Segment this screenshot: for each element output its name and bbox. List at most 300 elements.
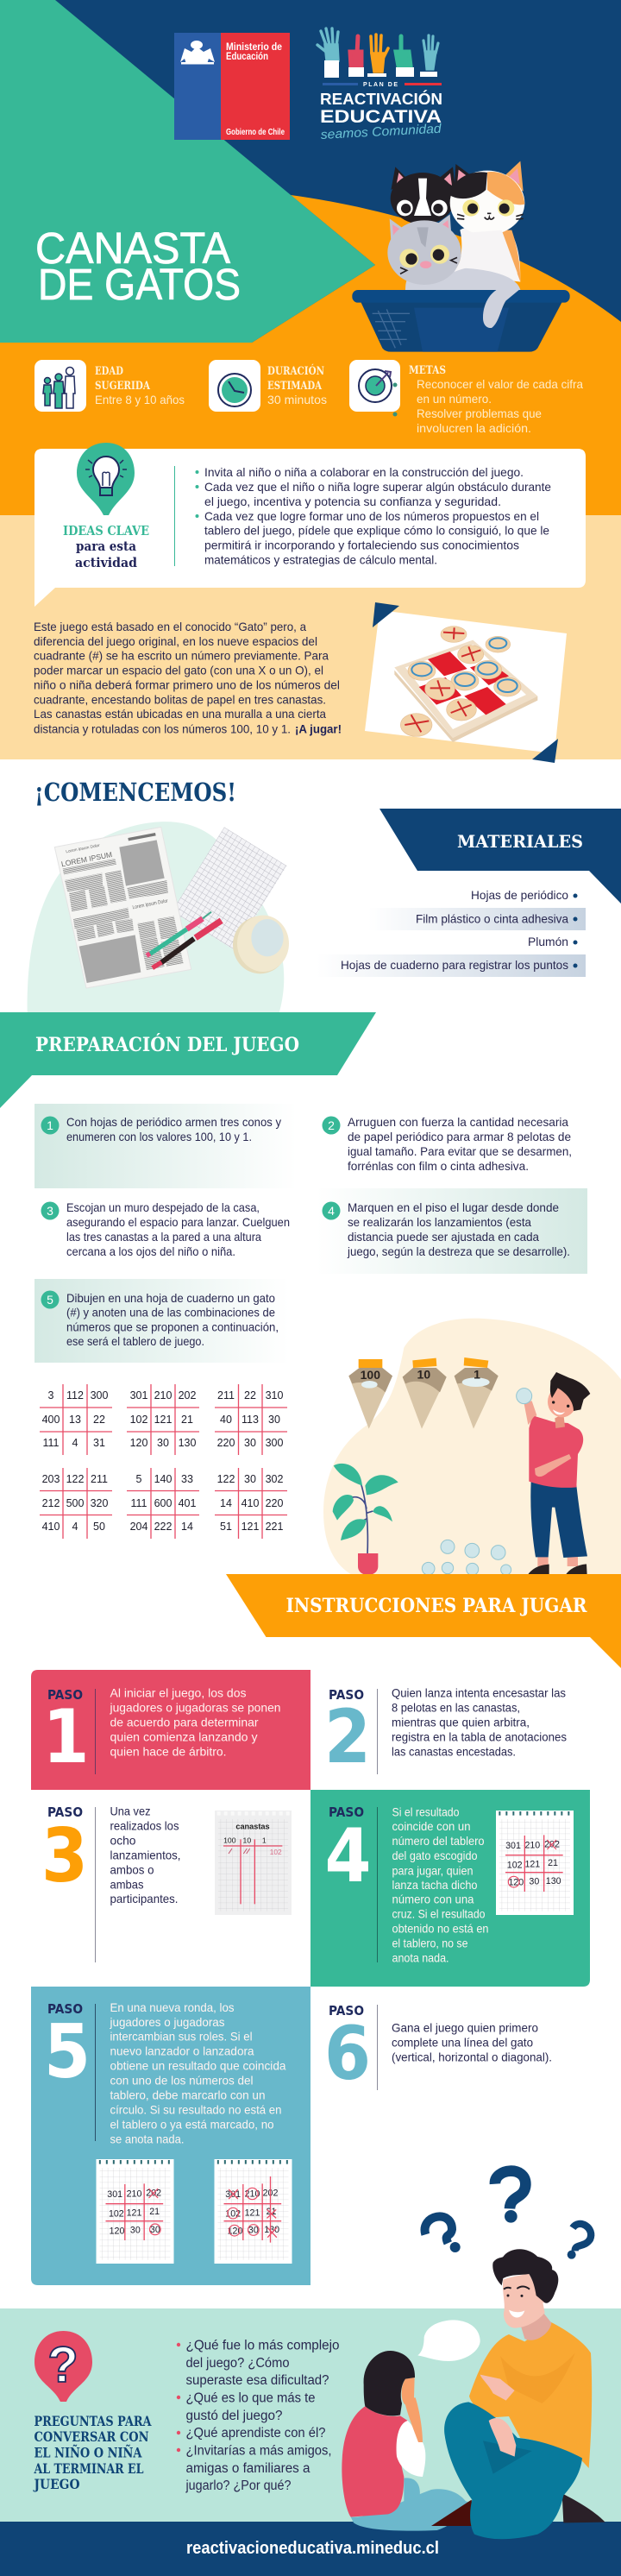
paso 1: jugadores o jugadoras se ponen: [110, 1700, 281, 1714]
text block: game description: distancia y rotuladas con los números 100, 10 y 1.: [34, 721, 291, 735]
paso 3: participantes.: [110, 1892, 178, 1905]
list: materials: [317, 888, 586, 977]
step card 2: forrénlas con film o cinta adhesiva.: [348, 1159, 529, 1173]
paso 3: ambos o: [110, 1862, 154, 1876]
logo: Ministerio de Educación: Ministerio de: [226, 42, 282, 53]
notepad: finished board: 121: [245, 2208, 260, 2219]
list: key ideas: Cada vez que logre formar uno de los números propuestos en el: [204, 509, 539, 523]
heading: questions: CONVERSAR CON: [34, 2428, 148, 2445]
board 4: 50: [93, 1521, 105, 1533]
paso 5: el tablero o ya está marcado, no: [110, 2118, 274, 2132]
paso 2: las canastas encestadas.: [392, 1745, 516, 1759]
notepad: canastas tally: 10: [243, 1836, 251, 1845]
list: questions: ¿Qué fue lo más complejo: [186, 2339, 340, 2352]
question marks: [425, 2171, 591, 2251]
card: age: EDAD: [95, 365, 123, 378]
logo: Ministerio de Educación: Gobierno de Chile: [226, 127, 285, 137]
heading: questions: PREGUNTAS PARA: [34, 2413, 152, 2429]
board 6: 221: [266, 1521, 283, 1533]
paso 6: 6: [324, 2011, 371, 2097]
step card 5: números que se proponen a continuación,: [66, 1320, 279, 1334]
panel: key ideas callout: para esta: [76, 539, 136, 554]
notepad: board with circle: 21: [149, 2207, 160, 2217]
paper balls: [422, 1540, 511, 1575]
newspaper: [54, 827, 191, 988]
heading: questions: EL NIÑO O NIÑA: [34, 2444, 142, 2461]
panel: key ideas callout: [34, 443, 586, 607]
list: questions: ¿Qué aprendiste con él?: [186, 2426, 326, 2441]
step card 1: Con hojas de periódico armen tres conos y: [66, 1115, 281, 1129]
paso 4: coincide con un: [392, 1819, 471, 1833]
step card 4: Marquen en el piso el lugar desde donde: [348, 1200, 559, 1214]
board 1: 22: [93, 1414, 105, 1426]
title: DE GATOS: [38, 260, 241, 309]
notepad: marked board: 30: [529, 1877, 539, 1887]
board 6: 121: [242, 1521, 259, 1533]
notepad: finished board: 120: [228, 2226, 242, 2236]
step card 2: de papel periódico para armar 8 pelotas de: [348, 1130, 571, 1143]
newspaper: LOREM IPSUM: [60, 850, 113, 868]
card: duration: [209, 360, 327, 412]
step card 4: distancia puede ser ajustada en cada: [348, 1230, 539, 1244]
card: goals: [349, 360, 583, 435]
board 1: 111: [42, 1437, 60, 1449]
card: age: SUGERIDA: [95, 380, 151, 393]
list: questions: ¿Invitarías a más amigos,: [186, 2444, 331, 2458]
list: questions: amigas o familiares a: [186, 2461, 310, 2476]
cone 10: [403, 1358, 447, 1429]
board 2: 210: [154, 1389, 172, 1401]
board 4: 320: [91, 1497, 108, 1509]
cone 100: 100: [361, 1368, 380, 1382]
notepad: canastas tally: 100: [223, 1836, 236, 1845]
paso 3: lanzamientos,: [110, 1849, 181, 1862]
notepad: canastas tally: [215, 1811, 292, 1915]
step card 5: 5: [47, 1293, 53, 1307]
paso 6: Gana el juego quien primero: [392, 2021, 538, 2035]
paso 3: realizados los: [110, 1819, 179, 1833]
notepad: board with circle: 30: [130, 2226, 141, 2236]
notepad: finished board: 130: [264, 2225, 279, 2235]
step card 5: (#) y anoten una de las combinaciones de: [66, 1305, 275, 1319]
board 5: 401: [179, 1497, 196, 1509]
paso 3: Una vez: [110, 1804, 150, 1817]
board 1: 13: [69, 1414, 81, 1426]
notepad: marked board: 202: [544, 1839, 560, 1849]
board 1: 400: [42, 1414, 60, 1426]
notepad: canastas tally: canastas: [235, 1822, 270, 1830]
list: questions: [177, 2339, 340, 2493]
icon: coat of arms: [180, 41, 215, 64]
calico cat: [450, 161, 524, 282]
board 3: 22: [244, 1389, 256, 1401]
notepad: board with circle: 120: [110, 2226, 124, 2236]
notepad: board with circle: 210: [127, 2189, 141, 2199]
board 2: 121: [154, 1414, 172, 1426]
notepad: canastas tally: 102: [270, 1848, 282, 1856]
step card 4: [317, 1188, 587, 1274]
pens: [147, 912, 222, 968]
paso 5: se anota nada.: [110, 2132, 185, 2145]
icon: light bulb pin: [77, 443, 135, 515]
card: goals: involucren la adición.: [417, 421, 531, 435]
paso 4: del gato escogido: [392, 1849, 478, 1862]
list: questions: ¿Qué es lo que más te: [186, 2390, 316, 2406]
banner: Preparación del juego: PREPARACIÓN DEL JUEGO: [35, 1033, 299, 1056]
board 4: 203: [42, 1473, 60, 1485]
paso 3: 3: [41, 1813, 88, 1899]
step card 3: asegurando el espacio para lanzar. Cuelguen: [66, 1215, 290, 1229]
paso 5: 5: [44, 2009, 91, 2095]
graph paper: [172, 827, 287, 950]
board 5: 111: [130, 1497, 147, 1509]
panel: key ideas callout: IDEAS CLAVE: [63, 523, 149, 539]
notepad: finished board: 202: [263, 2188, 278, 2198]
board 4: 500: [66, 1497, 84, 1509]
banner: Materiales: [380, 809, 621, 904]
icon: target: [359, 369, 392, 402]
paso 6: PASO: [329, 2003, 364, 2019]
board 4: 122: [66, 1473, 84, 1485]
title: CANASTA: [35, 224, 230, 273]
photo: tic-tac-toe board: [365, 602, 567, 763]
notepad: marked board: 130: [546, 1876, 561, 1886]
paso 1: quien comienza lanzando y: [110, 1729, 257, 1743]
list: key ideas: permitirá ir incorporando y fortaleciendo sus conocimientos: [204, 539, 519, 552]
notepad: finished board: [214, 2159, 292, 2264]
text block: game description: poder marcar un espacio del gato (con una X o un O), el: [34, 663, 323, 677]
board 2: 202: [179, 1389, 196, 1401]
step card 3: las tres canastas a la pared a una altura: [66, 1230, 261, 1244]
black cat: [391, 167, 455, 224]
card: goals: en un número.: [417, 392, 492, 406]
notepad: finished board: 301: [225, 2189, 241, 2200]
text block: game description: niño o niña deberá formar primero uno de los números del: [34, 678, 340, 692]
board 5: 5: [136, 1473, 142, 1485]
board 1: 3: [48, 1389, 54, 1401]
board 5: 600: [154, 1497, 172, 1509]
board 5: 33: [181, 1473, 193, 1485]
step card 2: [323, 1115, 572, 1173]
list: key ideas: matemáticos y estrategias de cálculo mental.: [204, 552, 437, 566]
board 2: 130: [179, 1437, 196, 1449]
list: materials: Hojas de periódico: [471, 888, 568, 902]
step card 4: se realizarán los lanzamientos (esta: [348, 1215, 531, 1229]
notepad: marked board: 21: [548, 1858, 558, 1868]
step card 1: enumeren con los valores 100, 10 y 1.: [66, 1130, 252, 1143]
list: key ideas: el juego, incentiva y potencia su confianza y seguridad.: [204, 494, 501, 508]
board 6: 220: [266, 1497, 283, 1509]
paso 1: de acuerdo para determinar: [110, 1716, 259, 1729]
banner: Instrucciones para jugar: INSTRUCCIONES PARA JUGAR: [286, 1595, 587, 1617]
paso 3: PASO: [47, 1804, 83, 1820]
notepad: marked board: 102: [507, 1860, 523, 1870]
heading: questions: AL TERMINAR EL: [34, 2460, 144, 2477]
notepad: finished board: 30: [248, 2226, 259, 2236]
text block: game description: Este juego está basado en el conocido “Gato” pero, a: [34, 620, 306, 633]
speech bubble: [417, 2320, 480, 2361]
board 5: 222: [154, 1521, 172, 1533]
basket: [352, 290, 570, 352]
board 4: 4: [72, 1521, 78, 1533]
notepad: board with circle: 102: [109, 2208, 124, 2219]
child: [342, 2351, 472, 2531]
illustration: father and child talking: [342, 2171, 605, 2539]
newspaper: Lorem Ipsum Dolor: [132, 898, 168, 910]
cone 10: 10: [417, 1368, 430, 1382]
paso 1: Al iniciar el juego, los dos: [110, 1686, 247, 1700]
board 1: 112: [66, 1389, 84, 1401]
paso 4: número del tablero: [392, 1834, 485, 1848]
list: questions: superaste esa dificultad?: [186, 2373, 329, 2388]
paso 1: 1: [43, 1694, 90, 1780]
step card 5: Dibujen en una hoja de cuaderno un gato: [66, 1291, 275, 1305]
paso 1: [31, 1670, 310, 1790]
board 1: 4: [72, 1437, 78, 1449]
notepad: board with circle: 30: [150, 2225, 160, 2235]
paso 2: 8 pelotas en las canastas,: [392, 1700, 520, 1714]
paso 2: [324, 1686, 567, 1780]
logo: Ministerio de Educación: Educación: [226, 52, 268, 62]
step card 5: ese será el tablero de juego.: [66, 1334, 204, 1348]
paso 2: Quien lanza intenta encesastar las: [392, 1686, 566, 1700]
cone 1: [455, 1357, 499, 1429]
newspaper: Lorem Ipsum Dolor: [66, 843, 101, 853]
board 6: 302: [266, 1473, 283, 1485]
card: duration: 30 minutos: [267, 393, 327, 406]
paso 3: ambas: [110, 1878, 143, 1892]
paso 5: En una nueva ronda, los: [110, 2000, 235, 2014]
paso 6: complete una línea del gato: [392, 2035, 533, 2049]
plant: [333, 1464, 398, 1575]
paso 2: 2: [324, 1694, 371, 1780]
paso 5: círculo. Si su resultado no está en: [110, 2102, 281, 2116]
paso 5: con uno de los números del: [110, 2073, 254, 2087]
logo: Plan de Reactivación Educativa: [317, 28, 442, 142]
paso 4: [310, 1790, 590, 1987]
list: key ideas: Cada vez que el niño o niña logre superar algún obstáculo durante: [204, 480, 551, 494]
gray cat: [387, 214, 520, 290]
text block: game description: cuadrante (#) se ha escrito un número previamente. Para: [34, 649, 329, 663]
card: age: [34, 360, 185, 412]
notepad: marked board: 210: [524, 1840, 540, 1850]
board 3: 211: [217, 1389, 235, 1401]
step card 2: 2: [328, 1118, 335, 1132]
board 2: 120: [130, 1437, 147, 1449]
notepad: marked board: 120: [508, 1877, 524, 1887]
icon: question pin: ?: [47, 2337, 78, 2393]
cone 100: [348, 1359, 392, 1429]
board 5: 140: [154, 1473, 172, 1485]
cream section background: [0, 515, 621, 759]
card: goals: METAS: [409, 364, 446, 377]
notepad: canastas tally: 1: [262, 1836, 267, 1845]
card: duration: DURACIÓN: [267, 363, 324, 378]
list: materials: Plumón: [528, 935, 568, 948]
board 4: 410: [42, 1521, 60, 1533]
paso 2: registra en la tabla de anotaciones: [392, 1729, 567, 1743]
list: questions: del juego? ¿Cómo: [186, 2356, 290, 2371]
board 1: 300: [91, 1389, 108, 1401]
board 6: 410: [242, 1497, 259, 1509]
board 5: 204: [130, 1521, 147, 1533]
logo: Ministerio de Educación: [174, 33, 290, 140]
paso 6: [324, 2003, 552, 2097]
paso 5: [31, 1987, 310, 2285]
board 4: 211: [91, 1473, 108, 1485]
list: materials: Film plástico o cinta adhesiva: [416, 911, 568, 925]
paso 4: anota nada.: [392, 1950, 448, 1964]
list: key ideas: Invita al niño o niña a colaborar en la construcción del juego.: [204, 465, 524, 479]
step card 2: Arruguen con fuerza la cantidad necesaria: [348, 1115, 568, 1129]
board 3: 300: [266, 1437, 283, 1449]
heading: ¡Comencemos!: ¡COMENCEMOS!: [34, 778, 236, 807]
notepad: marked board: 121: [524, 1860, 540, 1870]
paso 4: lanza tacha dicho: [392, 1878, 478, 1892]
tape roll: [233, 916, 289, 973]
panel: activity facts: [34, 360, 583, 435]
board 1: 31: [93, 1437, 105, 1449]
board 3: [215, 1384, 287, 1455]
card: goals: Reconocer el valor de cada cifra: [417, 377, 583, 391]
step card 1: 1: [47, 1118, 53, 1132]
paso 5: jugadores o jugadoras: [110, 2015, 224, 2029]
board 6: [215, 1468, 287, 1539]
list: questions: jugarlo? ¿Por qué?: [185, 2478, 292, 2493]
step card 4: juego, según la destreza que se desarrolle).: [347, 1244, 570, 1258]
step card 2: igual tamaño. Para evitar que se desarmen,: [348, 1144, 572, 1158]
board 3: 30: [244, 1437, 256, 1449]
text block: game description: diferencia del juego original, en los nueve espacios del: [34, 634, 317, 648]
board 4: 212: [42, 1497, 60, 1509]
step card 3: [41, 1200, 290, 1258]
heading: questions: JUEGO: [33, 2476, 79, 2492]
paso 2: mientras que quien arbitra,: [392, 1716, 530, 1729]
step card 3: 3: [47, 1204, 53, 1218]
board 2: 301: [130, 1389, 147, 1401]
board 2: [127, 1384, 199, 1455]
number boards: [40, 1384, 287, 1539]
card: goals: Resolver problemas que: [417, 406, 542, 420]
text block: game description: [34, 620, 342, 735]
paso 6: (vertical, horizontal o diagonal).: [392, 2050, 552, 2064]
paso 4: el tablero, no se: [392, 1937, 468, 1950]
cone 1: 1: [474, 1368, 480, 1382]
paso 4: Si el resultado: [392, 1805, 460, 1819]
card: duration: ESTIMADA: [267, 380, 323, 393]
icon: question pin: [34, 2331, 92, 2402]
logo: Plan de Reactivación Educativa: seamos Comunidad: [320, 122, 442, 142]
step card 1: [34, 1104, 297, 1188]
card: age: Entre 8 y 10 años: [95, 393, 185, 406]
banner: Instrucciones para jugar: [226, 1574, 621, 1668]
logo: Plan de Reactivación Educativa: PLAN DE: [363, 82, 398, 88]
paso 5: obtiene un resultado que coincida: [110, 2059, 286, 2073]
paso 2: PASO: [329, 1687, 364, 1703]
notepad: board with circle: 121: [127, 2208, 141, 2219]
paso 3: ocho: [110, 1833, 136, 1847]
board 2: 102: [130, 1414, 147, 1426]
list: key ideas: tablero del juego, pídele que explique cómo lo consiguió, lo que le: [204, 523, 549, 537]
paso 4: para jugar, quien: [392, 1864, 473, 1878]
banner: Preparación del juego: [0, 1012, 376, 1108]
banner: Materiales: MATERIALES: [457, 831, 583, 852]
board 3: 310: [266, 1389, 283, 1401]
board 3: 30: [268, 1414, 280, 1426]
paso 1: PASO: [47, 1687, 83, 1703]
notepad: board with circle: [97, 2159, 173, 2264]
footer URL: reactivacioneducativa.mineduc.cl: [186, 2539, 439, 2558]
paso 5: PASO: [47, 2001, 83, 2017]
board 3: 113: [242, 1414, 259, 1426]
icon: people: [43, 368, 75, 408]
cat paw: [483, 286, 519, 328]
board 5: 14: [181, 1521, 193, 1533]
board 6: 122: [217, 1473, 235, 1485]
text block: game description: Las canastas están ubicadas en una muralla a una cierta: [34, 707, 326, 721]
footer band: [0, 2522, 621, 2576]
list: questions: gustó del juego?: [186, 2409, 283, 2423]
list: key ideas: [195, 465, 551, 566]
text block: game description: cuadrante, encestando bolitas de papel en tres canastas.: [34, 692, 326, 706]
step card 4: 4: [328, 1204, 335, 1218]
notepad: board with circle: 202: [146, 2188, 161, 2198]
paso 5: nuevo lanzador o lanzadora: [110, 2044, 254, 2057]
paso 4: PASO: [329, 1804, 364, 1820]
paso 4: cruz. Si el resultado: [392, 1907, 486, 1921]
illustration: materials: [28, 822, 289, 1014]
list: materials: Hojas de cuaderno para registrar los puntos: [341, 958, 568, 972]
paso 5: tablero, debe marcarlo con un: [110, 2088, 266, 2102]
white chest: [455, 230, 518, 274]
step card 3: cercana a los ojos del niño o niña.: [66, 1244, 235, 1258]
notepad: finished board: 210: [245, 2189, 260, 2199]
logo: Plan de Reactivación Educativa: REACTIVACIÓN: [320, 90, 442, 108]
step card 3: Escojan un muro despejado de la casa,: [66, 1200, 260, 1214]
paso 1: quien hace de árbitro.: [110, 1745, 226, 1759]
board 6: 30: [244, 1473, 256, 1485]
panel: conversation questions background: [0, 2308, 621, 2522]
board 2: 21: [181, 1414, 193, 1426]
title: [35, 224, 241, 309]
board 5: [127, 1468, 199, 1539]
notepad: marked board: 301: [505, 1841, 521, 1851]
panel: key ideas callout: actividad: [75, 555, 137, 570]
board 3: 220: [217, 1437, 235, 1449]
board 6: 14: [220, 1497, 232, 1509]
board 4: [40, 1468, 112, 1539]
paso 4: obtenido no está en: [392, 1921, 488, 1935]
icon: raised hands: [317, 28, 438, 78]
heading: questions: [33, 2413, 152, 2492]
paso 3: [41, 1804, 292, 1962]
paso 4: número con una: [392, 1892, 474, 1905]
icon: clock: [218, 374, 251, 406]
father: [431, 2249, 605, 2539]
board 2: 30: [157, 1437, 169, 1449]
boy: [517, 1372, 590, 1575]
paso 5: intercambian sus roles. Si el: [110, 2030, 252, 2044]
board 6: 51: [220, 1521, 232, 1533]
text block: game description: ¡A jugar!: [295, 721, 342, 735]
notepad: marked board: [496, 1811, 574, 1915]
board 1: [40, 1384, 112, 1455]
board 3: 40: [220, 1414, 232, 1426]
paso 4: 4: [324, 1813, 371, 1899]
notepad: finished board: 21: [267, 2207, 276, 2217]
logo: Plan de Reactivación Educativa: EDUCATIVA: [320, 107, 442, 127]
header background: [0, 0, 621, 515]
